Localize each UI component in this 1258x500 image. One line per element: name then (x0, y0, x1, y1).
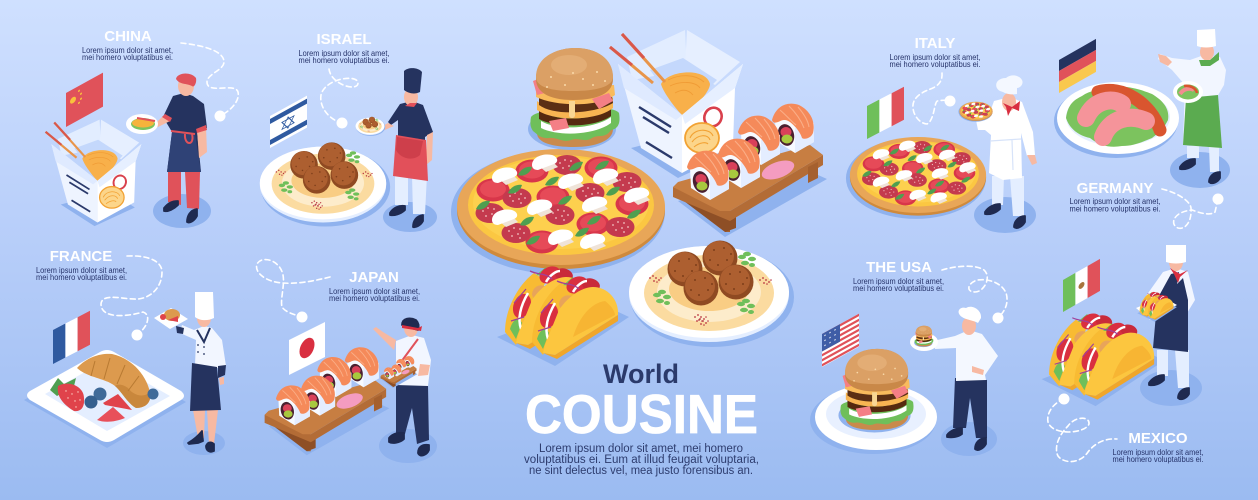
intro paragraph: voluptatibus ei. Eum at illud feugait voluptaria, (524, 454, 759, 466)
heading: COUSINE: COUSINE (525, 383, 758, 445)
heading: Israel: ISRAEL (316, 31, 372, 48)
central pizza (451, 149, 665, 274)
flag: France (53, 311, 90, 364)
text: USA description (853, 277, 944, 293)
panel: Japan (257, 260, 437, 463)
panel: The USA (810, 259, 1007, 456)
text: China description (82, 46, 173, 62)
text: Germany description (1070, 197, 1160, 214)
text: Italy description: mei homero voluptatibus ei. (890, 60, 980, 69)
central tacos (497, 263, 629, 366)
croissant plate (24, 350, 186, 448)
dashed connector: Mexico (1048, 394, 1117, 462)
flag: Mexico (1063, 259, 1100, 312)
chef: France (154, 292, 226, 455)
central burger (528, 48, 620, 150)
plate: France mini dish (154, 308, 188, 329)
burger (838, 349, 914, 432)
text: Mexico description: Lorem ipsum dolor sit amet, (1112, 448, 1204, 457)
text: Israel description (298, 49, 390, 65)
text: Israel description: mei homero voluptatibus ei. (298, 56, 390, 65)
text: France description: Lorem ipsum dolor sit amet, (36, 266, 127, 275)
heading: The USA: THE USA (866, 259, 932, 276)
dashed connector: Germany (1162, 189, 1224, 228)
text: China description: Lorem ipsum dolor sit amet, (82, 46, 173, 55)
dashed connector: Israel (321, 69, 358, 128)
dashed connector: France (101, 256, 162, 340)
chef: Italy (958, 75, 1037, 233)
plate: Italy mini pizza (958, 102, 993, 122)
plate: Japan mini sushi (381, 356, 417, 388)
plate: Germany mini dish (1173, 81, 1203, 103)
text: Japan description: mei homero voluptatibus ei. (329, 294, 420, 303)
dashed connector: USA (942, 266, 1007, 324)
heading: Mexico: MEXICO (1128, 430, 1188, 447)
noodle box (46, 120, 141, 226)
burger plate (810, 384, 937, 454)
panel: Italy (846, 35, 1037, 233)
sausage plate (1054, 82, 1179, 158)
text: Israel description: Lorem ipsum dolor sit amet, (298, 49, 390, 58)
chef: Japan (373, 318, 437, 463)
dashed connector: Italy (913, 73, 956, 124)
pizza (846, 137, 986, 219)
flag: Italy (867, 87, 904, 139)
chef: Israel (356, 68, 437, 232)
text: China description: mei homero voluptatibus ei. (82, 53, 173, 62)
panel: France (24, 248, 226, 455)
text: Japan description (329, 287, 420, 303)
text: Japan description: Lorem ipsum dolor sit amet, (329, 287, 420, 296)
heading: Japan: JAPAN (349, 269, 399, 286)
panel: Mexico (1042, 245, 1204, 464)
intro paragraph: ne sint delectus vel, mea justo forensibus an. (529, 465, 753, 477)
central sushi tray (673, 104, 827, 237)
heading: Italy: ITALY (915, 35, 955, 52)
flag: Israel (270, 96, 307, 148)
text: Germany description: Lorem ipsum dolor sit amet, (1070, 197, 1160, 206)
intro paragraph: Lorem ipsum dolor sit amet, mei homero (539, 443, 743, 455)
falafel plate (260, 142, 390, 226)
chef: China (126, 74, 211, 228)
flag: Japan (289, 322, 325, 375)
text: Italy description: Lorem ipsum dolor sit amet, (890, 53, 980, 62)
heading: Germany: GERMANY (1077, 180, 1153, 197)
flag: Germany (1059, 39, 1096, 93)
panel: central food collage (451, 30, 827, 366)
dashed connector: Japan (257, 260, 330, 322)
chef: Mexico (1136, 245, 1202, 406)
plate: China mini dish (126, 114, 158, 134)
plate: USA mini burger (910, 326, 938, 351)
heading: World: World (603, 359, 679, 389)
central falafel plate (629, 240, 794, 347)
flag: USA (822, 314, 859, 367)
text: France description (36, 266, 127, 282)
panel: China (46, 28, 238, 228)
heading: France: FRANCE (50, 248, 112, 265)
intro paragraph (524, 443, 759, 477)
flag: China (66, 73, 103, 127)
panel: Israel (260, 31, 437, 232)
panel: Germany (1054, 29, 1230, 228)
text: USA description: Lorem ipsum dolor sit amet, (853, 277, 944, 286)
plate: Israel mini dish (356, 117, 385, 136)
central noodle box (610, 30, 743, 178)
title: World Cousine (524, 359, 759, 477)
text: Germany description: mei homero voluptatibus ei. (1070, 204, 1160, 214)
plate: Mexico mini tacos (1136, 291, 1177, 322)
text: Mexico description (1112, 448, 1204, 464)
tacos (1042, 310, 1164, 406)
sushi tray (265, 347, 389, 455)
dashed connector: China (181, 43, 238, 122)
text: France description: mei homero voluptatibus ei. (36, 273, 127, 282)
text: Mexico description: mei homero voluptatibus ei. (1112, 455, 1204, 464)
chef: Germany (1158, 29, 1230, 188)
text: Italy description (890, 53, 980, 69)
chef: USA (910, 307, 998, 456)
text: USA description: mei homero voluptatibus ei. (853, 284, 944, 293)
heading: China: CHINA (104, 28, 152, 45)
